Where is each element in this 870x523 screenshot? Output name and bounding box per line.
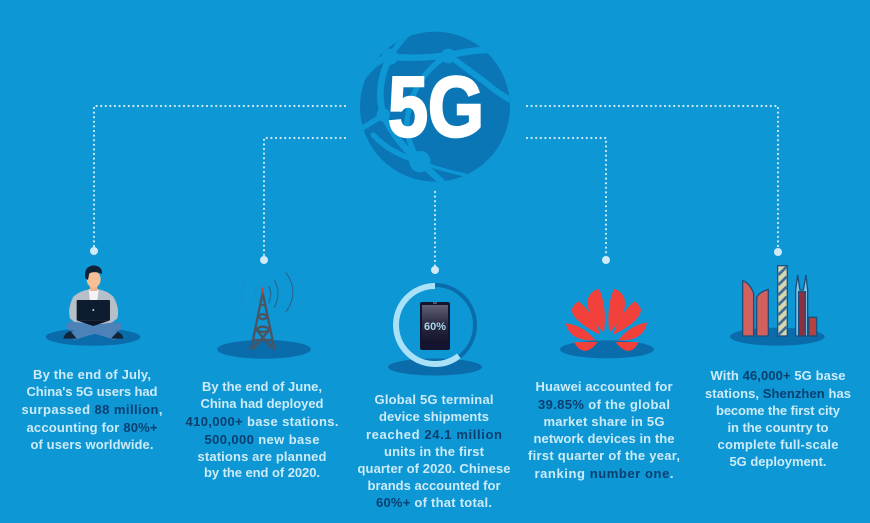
- text: terminals: units in the first: [384, 444, 485, 459]
- icon: Shenzhen skyline: [730, 266, 825, 346]
- text: Shenzhen: [705, 368, 851, 469]
- text: users: of users worldwide.: [30, 437, 154, 452]
- text: base stations: China had deployed: [200, 396, 324, 411]
- text: terminals: Global 5G terminal: [374, 392, 494, 407]
- 5G title: 5G: [388, 60, 484, 155]
- icon: person with laptop: [46, 265, 140, 346]
- text: users: [22, 367, 162, 452]
- text: Huawei: Huawei accounted for: [536, 379, 672, 394]
- connector: base stations: [260, 138, 345, 264]
- text: terminals: quarter of 2020. Chinese: [358, 461, 510, 476]
- text: Shenzhen: in the country to: [728, 420, 829, 435]
- text: base stations: stations are planned: [198, 449, 327, 464]
- text: base stations: 410,000+ base stations.: [186, 414, 338, 429]
- icon: Huawei logo: [560, 289, 654, 358]
- text: Huawei: 39.85% of the global: [538, 397, 670, 412]
- icon: phone progress ring: 60%: [424, 321, 446, 333]
- connector: Huawei: [527, 138, 610, 264]
- text: Huawei: network devices in the: [534, 431, 674, 446]
- text: base stations: by the end of 2020.: [204, 465, 320, 480]
- text: base stations: [186, 379, 338, 480]
- text: users: China's 5G users had: [26, 384, 158, 399]
- text: Huawei: first quarter of the year,: [528, 448, 680, 463]
- text: terminals: brands accounted for: [368, 478, 500, 493]
- connector: Shenzhen: [527, 106, 782, 256]
- globe icon: [360, 32, 510, 182]
- text: Huawei: market share in 5G: [544, 414, 664, 429]
- text: users: surpassed 88 million,: [22, 402, 162, 417]
- text: Shenzhen: 5G deployment.: [730, 454, 826, 469]
- connector: users: [90, 106, 345, 255]
- text: base stations: By the end of June,: [202, 379, 322, 394]
- text: terminals: reached 24.1 million: [366, 427, 502, 442]
- icon: signal tower: [217, 273, 311, 359]
- text: Huawei: ranking number one.: [534, 466, 674, 481]
- text: Shenzhen: stations, Shenzhen has: [705, 386, 851, 401]
- text: terminals: [358, 392, 510, 510]
- text: Huawei: [528, 379, 680, 481]
- connector: terminals: [431, 192, 439, 274]
- text: users: By the end of July,: [33, 367, 151, 382]
- text: users: accounting for 80%+: [26, 420, 158, 435]
- text: terminals: 60%+ of that total.: [376, 495, 492, 510]
- text: base stations: 500,000 new base: [204, 432, 320, 447]
- text: Shenzhen: become the first city: [716, 403, 841, 418]
- text: Shenzhen: With 46,000+ 5G base: [710, 368, 846, 383]
- icon: phone progress ring: [388, 285, 482, 376]
- text: terminals: device shipments: [379, 409, 489, 424]
- text: Shenzhen: complete full-scale: [718, 437, 838, 452]
